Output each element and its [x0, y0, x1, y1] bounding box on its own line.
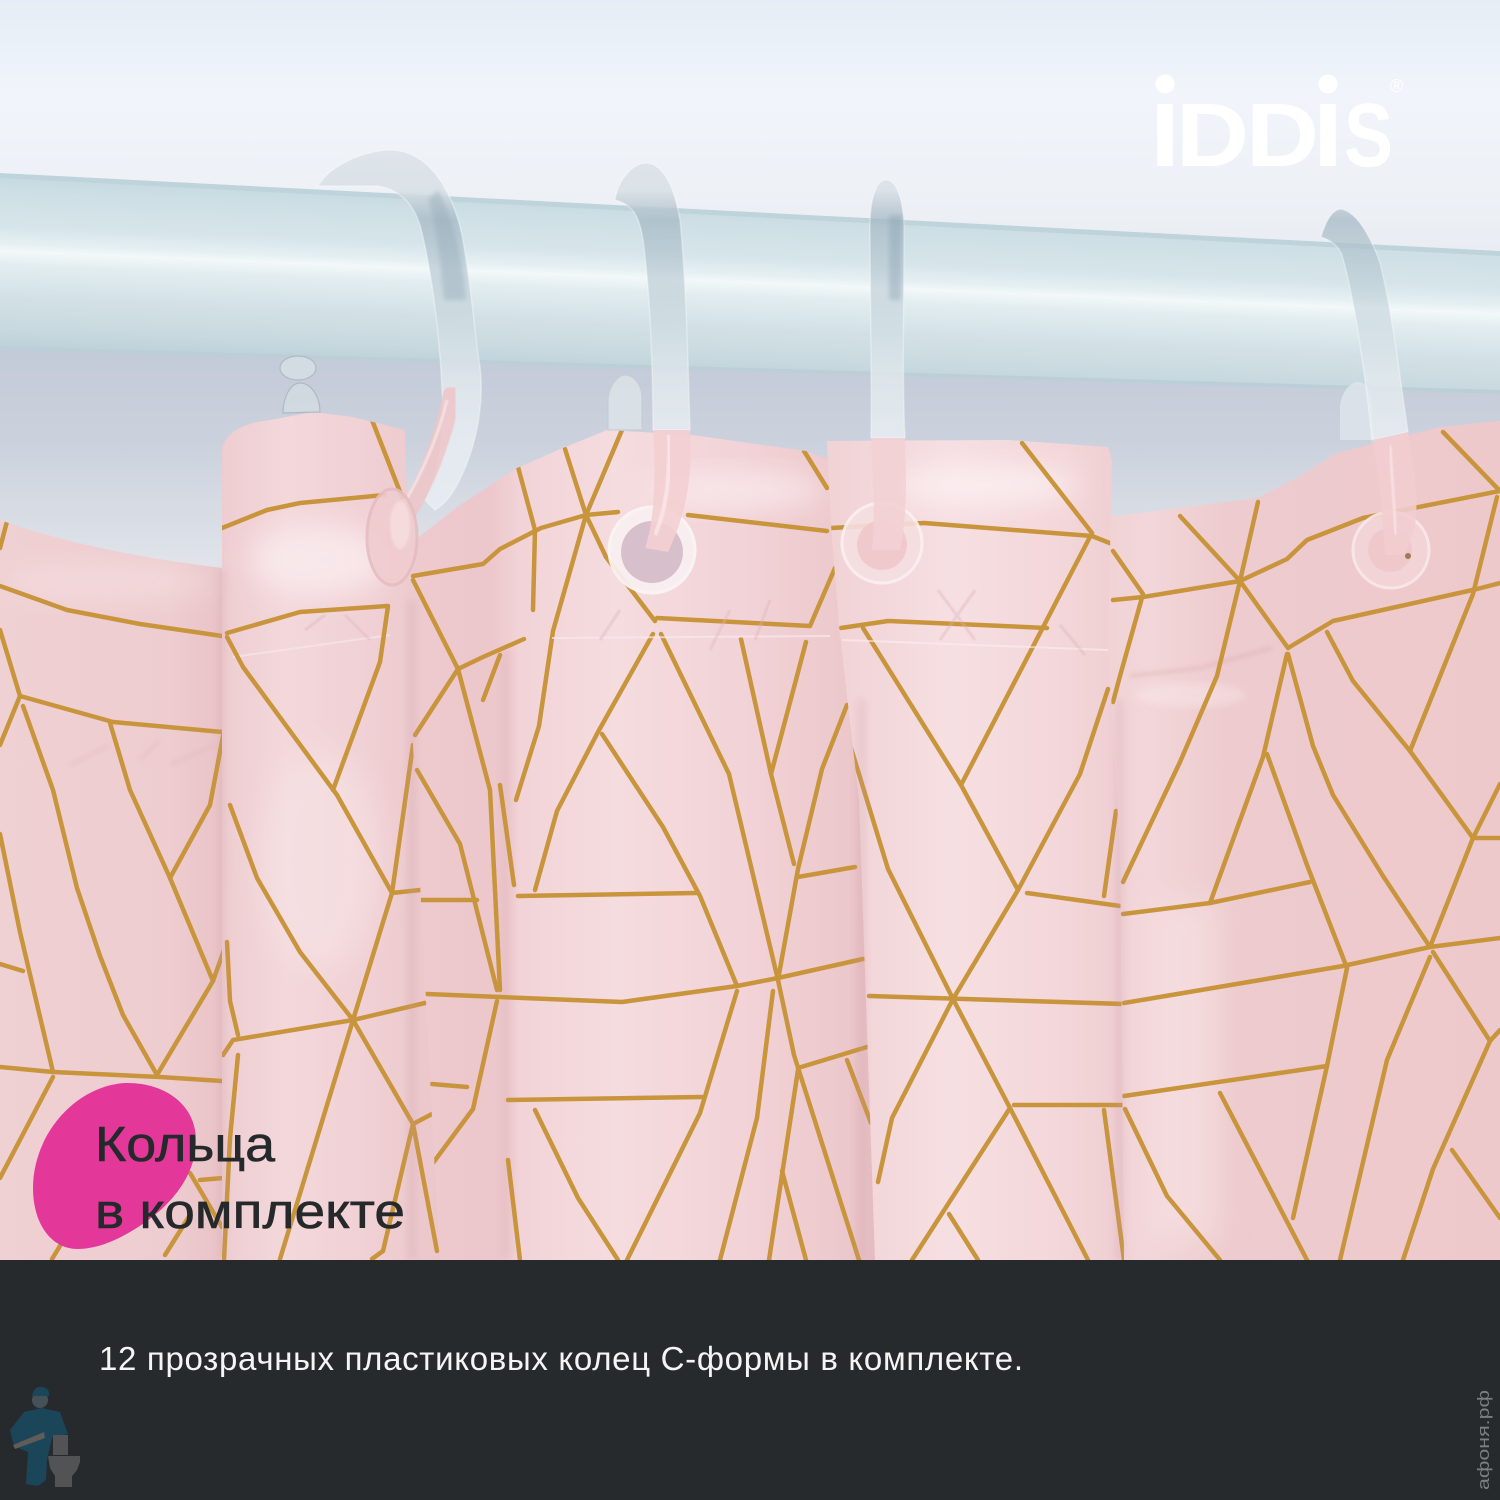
pink blob badge	[33, 1083, 196, 1249]
description text: 12 прозрачных пластиковых колец С-формы в комплекте.	[99, 1340, 1023, 1377]
curtain panel: right front pleat	[827, 440, 1124, 1260]
logo: IDDIS: I	[1313, 86, 1343, 186]
curtain panel: far right	[1100, 421, 1500, 1260]
logo: IDDIS: ®	[1390, 76, 1403, 96]
transparent ring 4 with eyelet	[1321, 209, 1429, 588]
transparent ring 3 with eyelet	[842, 180, 922, 583]
curtain panel: left front pleat	[222, 412, 440, 1260]
logo: IDDIS	[1150, 74, 1403, 186]
logo: IDDIS: D	[1176, 86, 1249, 186]
badge heading	[95, 1118, 405, 1239]
fold shadows	[219, 570, 1123, 1260]
curtain panel: centre pleat	[405, 430, 878, 1260]
watermark: афоня.рф	[1474, 1390, 1493, 1490]
transparent ring 2 with eyelet	[608, 163, 695, 593]
icon: plumber with toilet	[10, 1387, 80, 1487]
background wall	[0, 0, 1500, 800]
badge heading: Кольца	[95, 1118, 276, 1172]
shower rod	[0, 173, 1500, 413]
logo: IDDIS: I	[1150, 86, 1180, 186]
dark footer band	[0, 1260, 1500, 1500]
badge heading: в комплекте	[95, 1185, 405, 1239]
logo: IDDIS: D	[1246, 86, 1319, 186]
logo: IDDIS: S	[1344, 86, 1393, 186]
transparent ring 1	[280, 150, 481, 585]
curtain panel: far left	[0, 510, 227, 1260]
